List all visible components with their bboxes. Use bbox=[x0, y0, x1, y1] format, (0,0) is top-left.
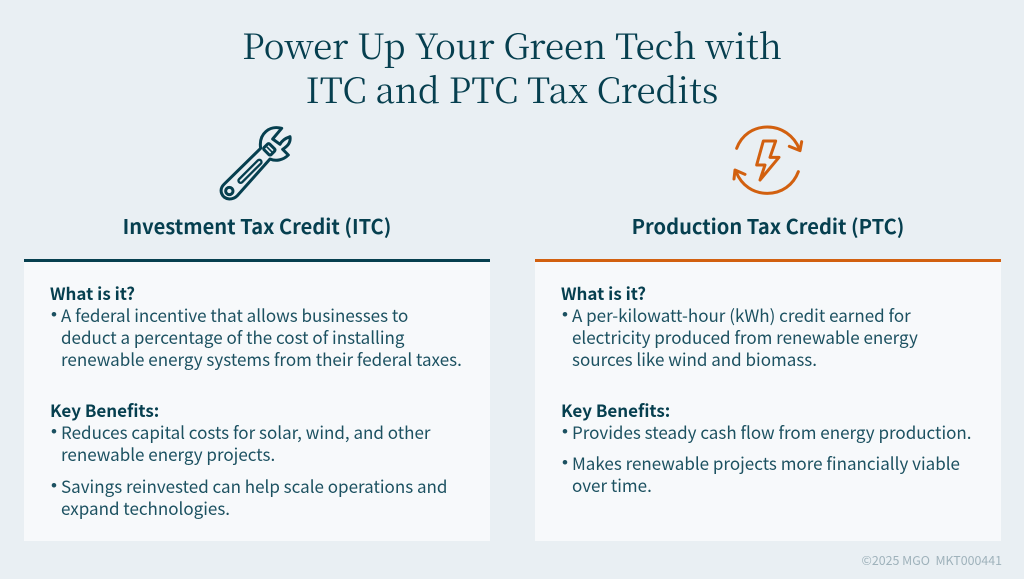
benefit 2 bbox=[562, 450, 960, 497]
title: Power Up Your Green Tech with bbox=[242, 19, 782, 69]
what is it heading: What is it? bbox=[50, 280, 135, 305]
panel: PTC: Makes renewable projects more financially viable bbox=[572, 450, 960, 475]
heading: PTC: Production Tax Credit (PTC) bbox=[632, 211, 904, 240]
heading: ITC: Investment Tax Credit (ITC) bbox=[123, 211, 391, 240]
panel: ITC: • bbox=[51, 422, 57, 441]
title bbox=[242, 19, 782, 113]
title: ITC and PTC Tax Credits bbox=[306, 63, 718, 113]
panel: PTC: • bbox=[562, 305, 568, 324]
panel: ITC bbox=[24, 259, 490, 541]
panel: PTC: electricity produced from renewable energy bbox=[572, 324, 918, 349]
panel: ITC: A federal incentive that allows businesses to bbox=[61, 302, 408, 327]
benefit 1 bbox=[562, 419, 972, 444]
panel: ITC: • bbox=[51, 476, 57, 495]
panel: ITC: renewable energy systems from their federal taxes. bbox=[61, 346, 462, 371]
panel: PTC: A per-kilowatt-hour (kWh) credit earned for bbox=[572, 302, 911, 327]
what is it heading: What is it? bbox=[561, 280, 646, 305]
panel: ITC: • bbox=[51, 305, 57, 324]
panel: ITC: Reduces capital costs for solar, wind, and other bbox=[61, 419, 430, 444]
benefit 1 bbox=[51, 419, 430, 466]
panel: PTC: sources like wind and biomass. bbox=[572, 346, 817, 371]
panel: ITC: Savings reinvested can help scale operations and bbox=[61, 473, 447, 498]
panel: ITC: renewable energy projects. bbox=[61, 441, 275, 466]
icon: wrench bbox=[220, 126, 292, 200]
panel: PTC: • bbox=[562, 453, 568, 472]
panel: PTC: Provides steady cash flow from energy production. bbox=[572, 419, 972, 444]
panel: ITC: deduct a percentage of the cost of installing bbox=[61, 324, 405, 349]
panel: ITC: expand technologies. bbox=[61, 495, 230, 520]
what is it text bbox=[562, 302, 918, 371]
panel: PTC: • bbox=[562, 422, 568, 441]
what is it text bbox=[51, 302, 462, 371]
benefit 2 bbox=[51, 473, 447, 520]
key benefits heading: Key Benefits: bbox=[561, 397, 670, 422]
panel: PTC bbox=[535, 259, 1001, 541]
copyright: ©2025 MGO MKT000441 bbox=[862, 551, 1002, 569]
icon: energy cycle bbox=[732, 126, 804, 195]
key benefits heading: Key Benefits: bbox=[50, 397, 159, 422]
panel: PTC: over time. bbox=[572, 472, 652, 497]
